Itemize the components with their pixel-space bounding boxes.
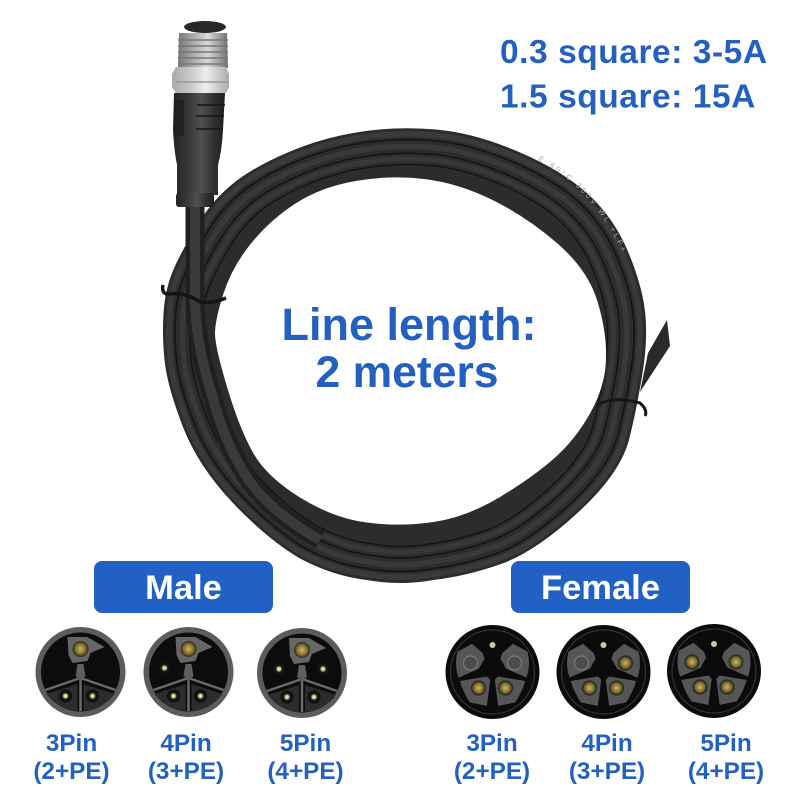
female 4 pin label: 4Pin <box>581 730 633 757</box>
female 3 pin label: (2+PE) <box>454 758 530 785</box>
connector knurled ring <box>172 67 229 93</box>
connector cap <box>184 21 226 33</box>
male 5 pin label <box>267 730 344 785</box>
female 4 pin label: (3+PE) <box>569 758 645 785</box>
line length label: Line length: <box>282 299 536 350</box>
female 5 pin label: (4+PE) <box>688 758 764 785</box>
female 4 pin label <box>569 730 645 785</box>
female 5 pin label: 5Pin <box>700 730 752 757</box>
female 3 pin label <box>454 730 530 785</box>
cable strand from connector <box>195 205 320 540</box>
male 3 pin label <box>33 730 110 785</box>
male 4 pin connector face <box>144 627 234 717</box>
left cable tie <box>163 285 226 302</box>
female badge <box>511 561 690 613</box>
female 3 pin connector face <box>446 625 540 719</box>
M12 connector <box>172 21 229 207</box>
male 5 pin connector face <box>257 628 347 718</box>
female 5 pin connector face <box>667 624 761 718</box>
female 3 pin label: 3Pin <box>466 730 518 757</box>
current ratings: 1.5 square: 15A <box>500 78 756 116</box>
cable coil <box>160 128 670 583</box>
cable loose end <box>640 320 670 392</box>
female 4 pin connector face <box>556 625 650 719</box>
male badge <box>94 561 273 613</box>
male 3 pin label: 3Pin <box>46 730 97 757</box>
male badge: Male <box>145 569 222 607</box>
male 3 pin label: (2+PE) <box>33 758 110 785</box>
connector collar <box>176 193 214 207</box>
line length label: 2 meters <box>315 348 499 397</box>
male 4 pin label <box>148 730 224 785</box>
current ratings <box>500 34 768 116</box>
right cable tie <box>599 400 646 416</box>
line length label <box>282 299 536 397</box>
female badge: Female <box>541 569 660 607</box>
connector thread <box>178 33 228 68</box>
male 5 pin label: 5Pin <box>280 730 331 757</box>
male 4 pin label: (3+PE) <box>148 758 224 785</box>
male 4 pin label: 4Pin <box>160 730 212 757</box>
cable print marking: E 80°C 300V WL +LF+ <box>538 156 625 250</box>
male 5 pin label: (4+PE) <box>267 758 344 785</box>
male 3 pin connector face <box>36 627 126 717</box>
connector body <box>173 93 225 195</box>
current ratings: 0.3 square: 3-5A <box>500 34 768 71</box>
female 5 pin label <box>688 730 764 785</box>
